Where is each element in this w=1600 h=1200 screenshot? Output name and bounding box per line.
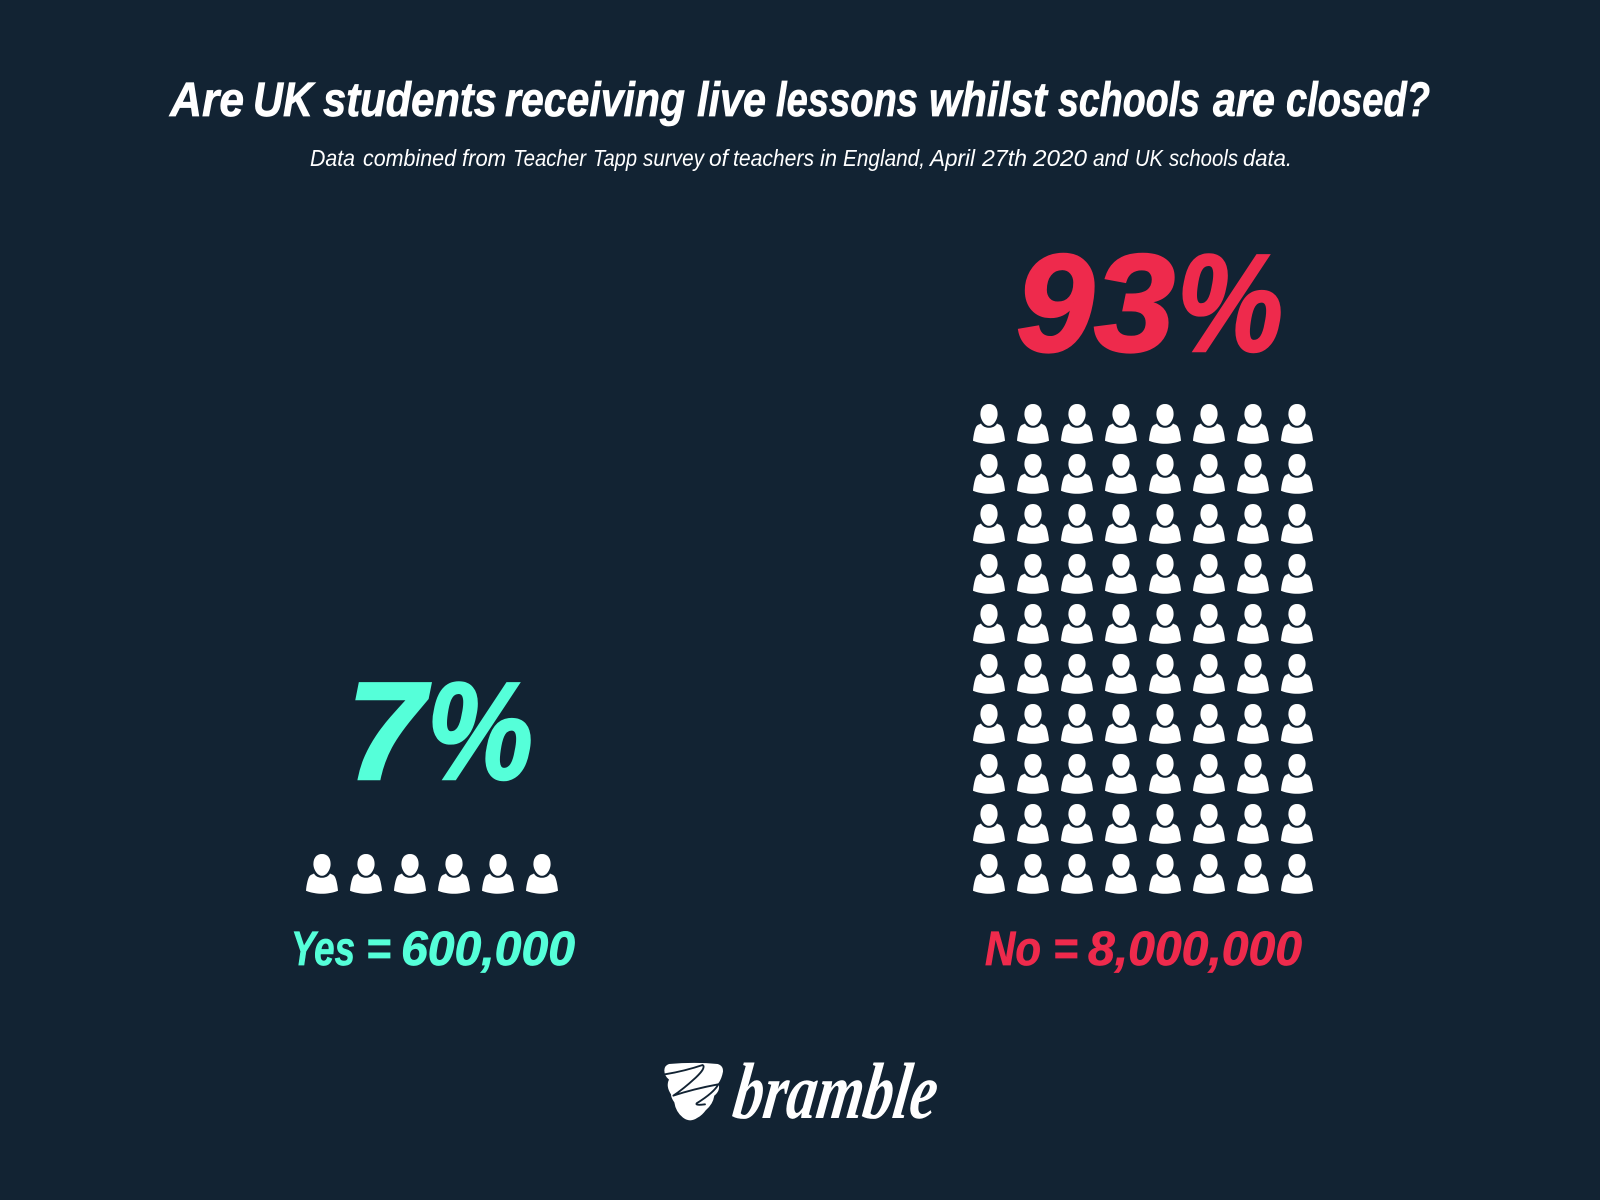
icon: bramble swirl mark <box>664 1063 723 1120</box>
title: closed? <box>1286 74 1430 127</box>
subtitle: schools <box>1169 145 1238 171</box>
wordmark: bramble <box>728 1047 944 1136</box>
subtitle: Teacher <box>513 145 587 171</box>
subtitle: 27th <box>981 145 1027 171</box>
yes count label: Yes <box>291 923 355 976</box>
subtitle: 2020 <box>1032 145 1087 171</box>
no count label: 8,000,000 <box>1088 923 1302 976</box>
subtitle: England, <box>843 145 925 171</box>
no percentage: % <box>1177 226 1283 381</box>
yes people icons <box>306 854 558 894</box>
no people icon grid <box>973 404 1313 894</box>
subtitle: in <box>820 145 837 171</box>
bramble logo <box>664 1047 944 1136</box>
yes count label: 600,000 <box>401 923 575 976</box>
yes count label <box>291 923 575 976</box>
subtitle: combined <box>363 145 457 171</box>
yes count label: = <box>366 923 391 976</box>
subtitle: UK <box>1135 145 1164 171</box>
no count label: = <box>1053 923 1078 976</box>
subtitle: teachers <box>733 145 814 171</box>
yes percentage: 7 <box>347 654 431 809</box>
yes percentage <box>347 654 533 809</box>
subtitle <box>310 145 1292 171</box>
yes percentage: % <box>427 654 533 809</box>
no count label <box>985 923 1302 976</box>
subtitle: and <box>1093 145 1129 171</box>
title: are <box>1213 74 1275 127</box>
no percentage: 9 <box>1016 226 1094 381</box>
title: schools <box>1058 74 1200 127</box>
subtitle: of <box>709 145 731 171</box>
no percentage: 3 <box>1094 226 1175 381</box>
title: students <box>323 74 497 127</box>
title: receiving <box>505 74 685 127</box>
subtitle: data. <box>1243 145 1292 171</box>
title: Are <box>169 74 244 127</box>
subtitle: Tapp <box>593 145 637 171</box>
subtitle: Data <box>310 145 355 171</box>
title <box>169 74 1430 127</box>
subtitle: April <box>928 145 976 171</box>
title: live <box>697 74 766 127</box>
title: lessons <box>776 74 918 127</box>
title: whilst <box>929 74 1049 127</box>
no percentage <box>1016 226 1283 381</box>
no count label: No <box>985 923 1041 976</box>
subtitle: from <box>462 145 506 171</box>
title: UK <box>253 74 316 127</box>
subtitle: survey <box>643 145 705 171</box>
